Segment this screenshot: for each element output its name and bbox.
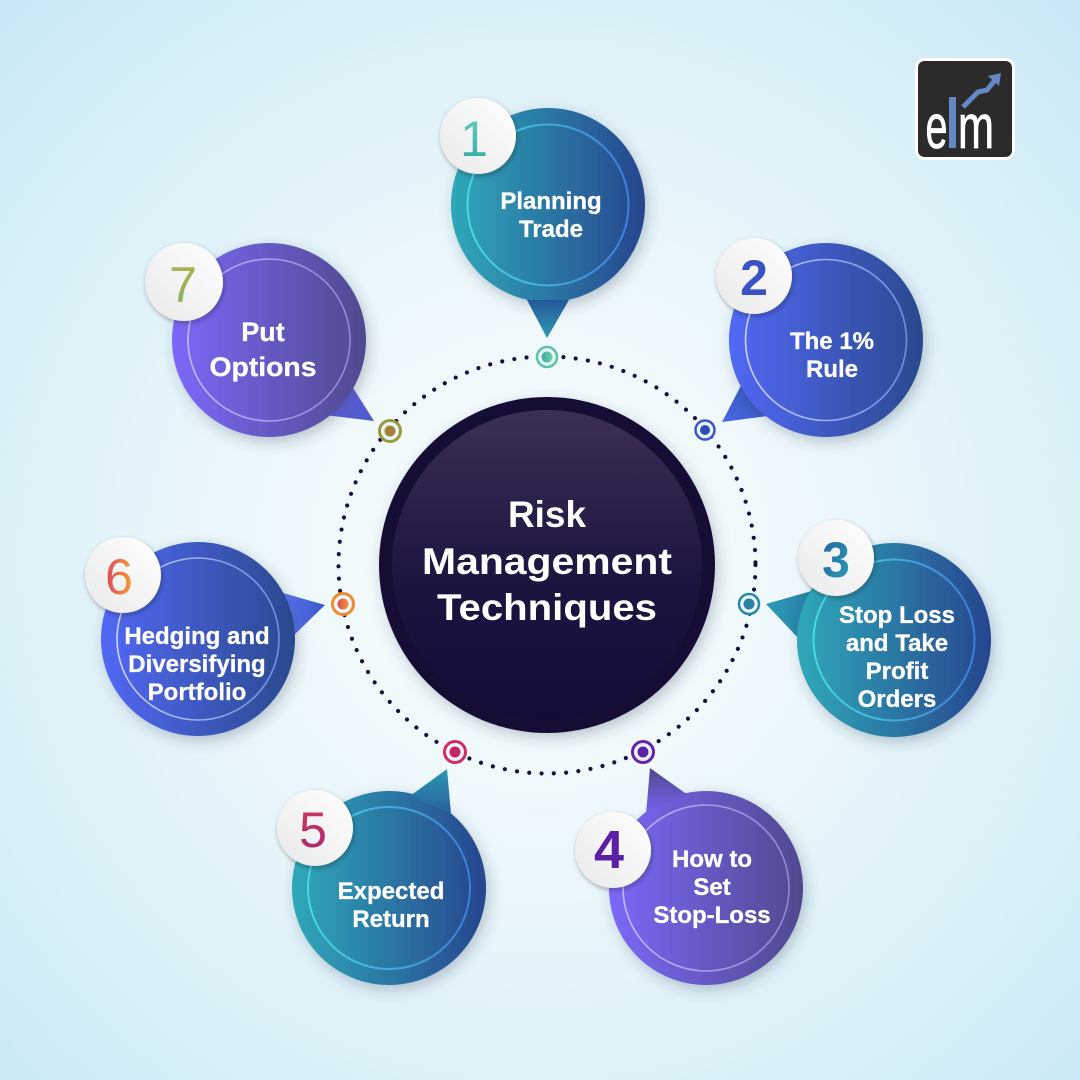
badge 3: 3 — [822, 532, 850, 588]
badge 1 — [440, 98, 516, 174]
bubble 4: How to Set Stop-Loss — [575, 768, 803, 985]
node 1 — [537, 347, 557, 367]
bubble 1: Planning Trade: Planning — [500, 188, 602, 215]
bubble 2: The 1% Rule: The 1% — [790, 328, 874, 355]
bubble 1: Planning Trade — [440, 98, 645, 338]
bubble 5: Expected Return: Return — [352, 906, 430, 933]
bubble 2: The 1% Rule: Rule — [806, 356, 858, 383]
badge 6: 6 — [105, 549, 133, 605]
bubble 3: Stop Loss and Take Profit Orders: Stop Loss — [839, 602, 955, 629]
bubble 7: Put Options — [145, 243, 374, 437]
node 6 — [332, 594, 354, 614]
node 7 — [380, 420, 400, 442]
bubble 2: The 1% Rule — [716, 238, 923, 437]
node 2 — [696, 420, 714, 440]
bubble 6: Hedging and Diversifying Portfolio — [85, 537, 325, 736]
badge 2: 2 — [740, 250, 768, 306]
logo: elm — [916, 60, 1014, 162]
center circle: Risk Management Techniques: Risk — [508, 494, 586, 535]
badge 2 — [716, 238, 792, 314]
logo: elm: m — [958, 93, 994, 162]
badge 7 — [145, 243, 223, 321]
center circle: Risk Management Techniques: Techniques — [437, 587, 657, 628]
badge 5 — [277, 790, 353, 866]
bubble 7: Put Options: Options — [210, 352, 316, 382]
badge 1: 1 — [460, 111, 488, 167]
badge 7: 7 — [169, 257, 197, 313]
center circle: Risk Management Techniques: Management — [422, 541, 672, 582]
badge 6 — [85, 537, 161, 613]
bubble 3: Stop Loss and Take Profit Orders: and Take — [846, 630, 948, 657]
bubble 5: Expected Return — [277, 769, 486, 985]
center circle: Risk Management Techniques — [379, 397, 715, 733]
badge 3 — [798, 520, 874, 596]
node 5 — [444, 742, 466, 762]
bubble 7: Put Options: Put — [241, 317, 285, 347]
bubble 4: How to Set Stop-Loss: How to — [672, 846, 752, 873]
badge 4: 4 — [594, 820, 624, 880]
dotted ring — [338, 356, 756, 774]
bubble 5: Expected Return: Expected — [338, 878, 444, 905]
badge 5: 5 — [299, 802, 327, 858]
badge 4 — [575, 812, 651, 888]
node 3 — [739, 594, 759, 614]
bubble 3: Stop Loss and Take Profit Orders: Profit — [866, 658, 928, 685]
bubble 4: How to Set Stop-Loss: Stop-Loss — [653, 902, 771, 929]
bubble 6: Hedging and Diversifying Portfolio: Portfolio — [148, 679, 246, 706]
bubble 4: How to Set Stop-Loss: Set — [693, 874, 731, 901]
bubble 3: Stop Loss and Take Profit Orders: Orders — [858, 686, 936, 713]
bubble 6: Hedging and Diversifying Portfolio: Hedging and — [124, 623, 270, 650]
node 4 — [632, 742, 654, 762]
bubble 1: Planning Trade: Trade — [519, 216, 583, 243]
bubble 6: Hedging and Diversifying Portfolio: Diversifying — [128, 651, 266, 678]
bubble 3: Stop Loss and Take Profit Orders — [766, 520, 991, 737]
logo: elm: e — [926, 93, 948, 162]
